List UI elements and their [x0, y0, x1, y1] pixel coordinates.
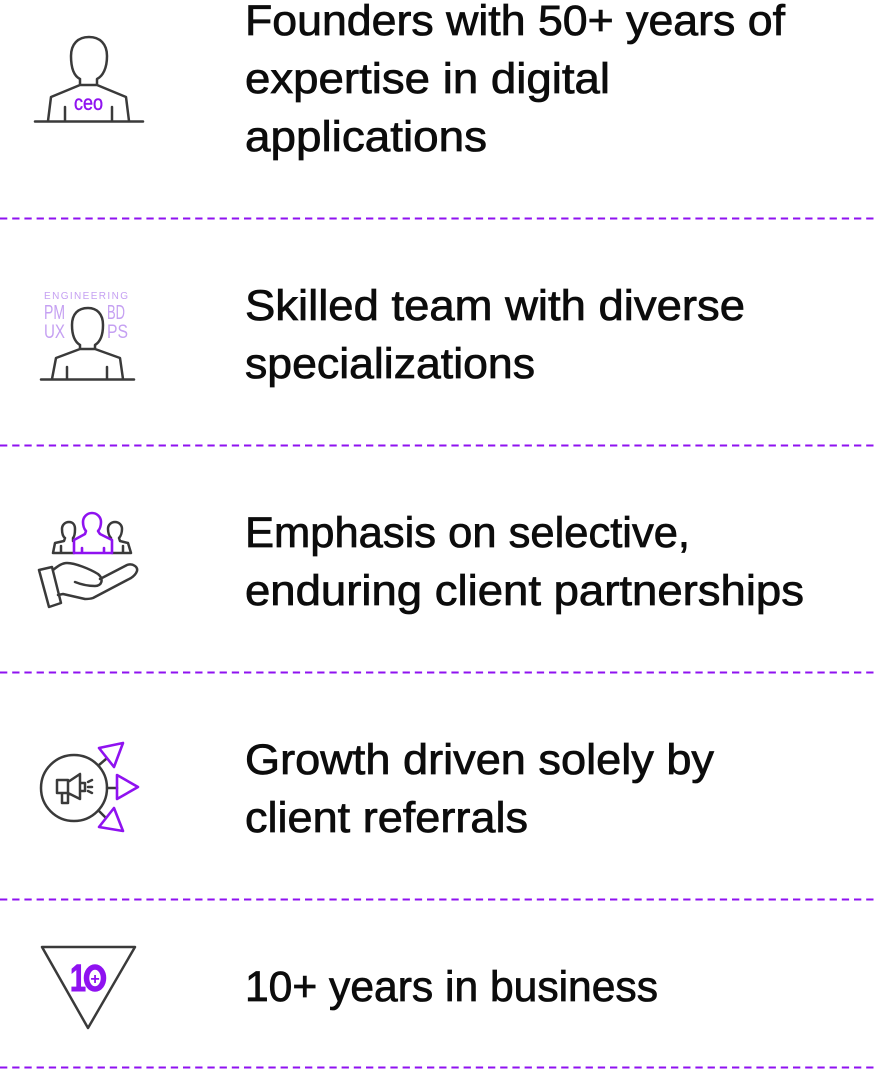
icon: team member with specializations: UX: [44, 322, 65, 343]
row 3: partnerships: [39, 510, 804, 615]
icon: CEO person: [35, 37, 143, 122]
icon: CEO person: ceo: [74, 92, 103, 115]
icon: team member with specializations: PS: [107, 322, 128, 343]
icon: team member with specializations: [41, 291, 134, 380]
row 5: years in business: [42, 947, 658, 1028]
icon: hand holding people: [39, 513, 137, 607]
icon: megaphone with arrows: [41, 743, 138, 831]
icon: 10+ triangle: [42, 947, 135, 1028]
text: 10+ years: 10+ years in business: [245, 964, 658, 1011]
text: skilled team: Skilled team with diverse: [245, 283, 745, 330]
icon: team member with specializations: ENGINEERING: [44, 291, 128, 302]
text: founders: applications: [245, 114, 487, 161]
icon: team member with specializations: PM: [44, 302, 65, 324]
text: founders: expertise in digital: [245, 56, 610, 103]
row 4: referrals: [41, 737, 715, 842]
text: referrals: Growth driven solely by: [245, 737, 715, 784]
text: referrals: client referrals: [245, 795, 528, 842]
icon: team member with specializations: BD: [107, 302, 125, 324]
row 2: skilled team: [41, 283, 745, 388]
text: partnerships: enduring client partnerships: [245, 568, 804, 615]
row 1: founders: [35, 0, 785, 161]
icon: 10+ triangle: 1: [70, 958, 86, 1000]
icon: 10+ triangle: +: [90, 971, 100, 988]
text: skilled team: specializations: [245, 341, 535, 388]
text: partnerships: Emphasis on selective,: [245, 510, 690, 557]
